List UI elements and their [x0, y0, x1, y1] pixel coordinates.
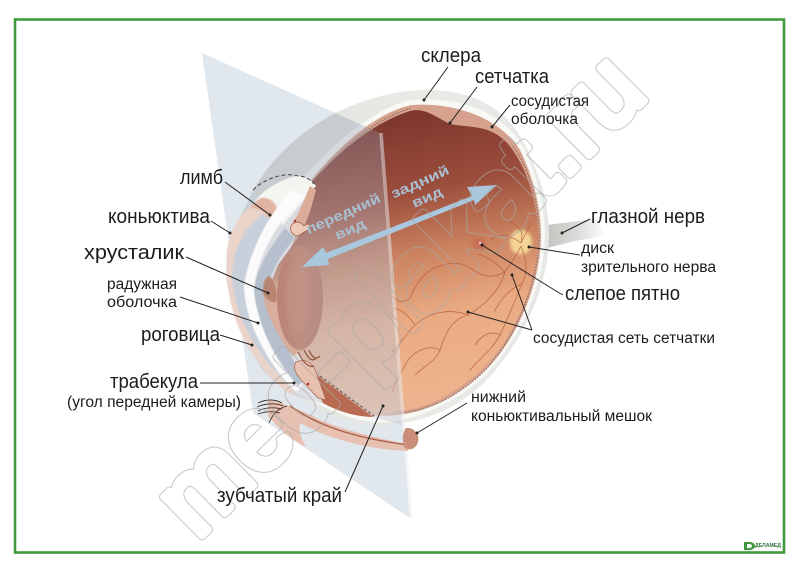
ciliary body lower [294, 350, 326, 400]
label: сосудистая оболочка: оболочка [511, 111, 578, 128]
label: задний вид: вид [409, 183, 445, 211]
label: хрусталик: хрусталик [84, 242, 184, 264]
label: радужная оболочка [107, 276, 177, 311]
label: зубчатый край: зубчатый край [217, 485, 342, 507]
label: передний вид: вид [332, 215, 368, 243]
limbus fold [253, 175, 316, 226]
leader end dots [228, 98, 564, 434]
label: слепое пятно: слепое пятно [565, 283, 680, 305]
label: сетчатка: сетчатка [475, 66, 550, 88]
label: трабекула: трабекула [110, 371, 199, 393]
transparent dividing plane [202, 53, 410, 518]
label: диск зрительного нерва [581, 240, 716, 276]
label: роговица: роговица [141, 324, 221, 346]
label: склера: склера [421, 45, 482, 67]
blue-grey iris and cornea [226, 190, 305, 396]
choroid layer [278, 105, 541, 416]
eyelashes [257, 400, 287, 423]
macula spot [472, 237, 486, 251]
plane right edge [381, 133, 411, 518]
optic disc [510, 230, 532, 254]
lens [277, 246, 323, 350]
label: диск зрительного нерва: зрительного нерва [581, 259, 716, 276]
label: угол передней камеры: (угол передней камеры) [67, 394, 241, 411]
label: сосудистая оболочка [511, 93, 589, 128]
logo: Деламед: ДЕЛАМЕД [755, 543, 781, 549]
ciliary body upper [290, 186, 316, 236]
eye illustration [226, 90, 606, 518]
label: нижний коньюктивальный мешок [471, 389, 652, 425]
label: сосудистая сеть сетчатки: сосудистая сеть сетчатки [533, 330, 715, 347]
retina edge dots [310, 108, 539, 413]
label: лимб: лимб [180, 167, 223, 189]
label: передний вид: передний [303, 190, 383, 237]
plane tint over eye [241, 113, 402, 425]
retinal blood vessels [392, 222, 530, 392]
lower eyelid and conjunctival sac [268, 400, 418, 451]
label: сосудистая оболочка: сосудистая [511, 93, 589, 110]
label: глазной нерв: глазной нерв [591, 206, 705, 228]
double arrow [302, 185, 497, 267]
optic nerve [540, 219, 606, 249]
label: передний вид [303, 190, 390, 253]
label: радужная оболочка: радужная [107, 276, 177, 293]
label: диск зрительного нерва: диск [581, 240, 614, 257]
ora serrata wedge [313, 372, 373, 417]
label: радужная оболочка: оболочка [107, 294, 177, 311]
white inner sclera band [250, 99, 545, 422]
label: нижний коньюктивальный мешок: нижний [471, 389, 526, 406]
label: коньюктива: коньюктива [108, 206, 211, 228]
leader lines [180, 67, 590, 492]
sclera outer shell [226, 90, 549, 426]
logo: Деламед [744, 542, 781, 550]
serrated edge dashed line [320, 376, 374, 416]
label: задний вид [388, 162, 458, 217]
label: нижний коньюктивальный мешок: коньюктивальный мешок [471, 408, 652, 425]
label: задний вид: задний [388, 162, 452, 201]
watermark [159, 57, 650, 540]
retina interior [268, 110, 538, 417]
